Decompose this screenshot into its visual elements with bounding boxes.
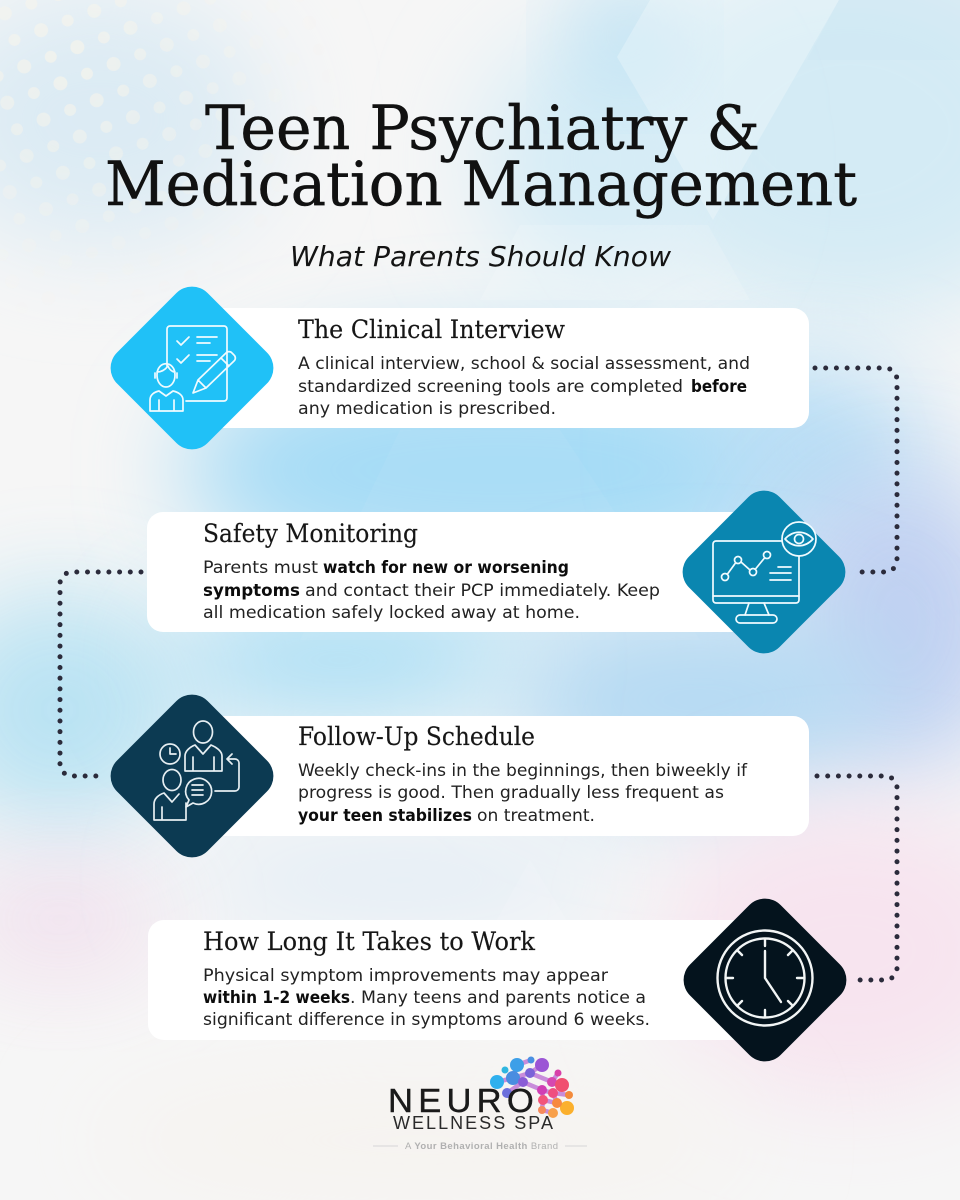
body text bbox=[203, 966, 650, 1030]
title: Medication Management bbox=[105, 149, 857, 220]
logo wordmark: NEURO bbox=[388, 1082, 539, 1119]
body text: before bbox=[691, 377, 747, 397]
logo mark: brain of dots bbox=[490, 1056, 574, 1118]
heading: The Clinical Interview bbox=[298, 315, 566, 344]
body text: significant difference in symptoms around 6 weeks. bbox=[203, 1010, 650, 1030]
heading: Follow-Up Schedule bbox=[298, 722, 535, 751]
body text: your teen stabilizes bbox=[298, 806, 472, 826]
card bbox=[148, 920, 767, 1040]
body text bbox=[298, 354, 750, 419]
body text: Physical symptom improvements may appear bbox=[203, 966, 608, 986]
panel: how long it takes to work bbox=[148, 889, 856, 1071]
connector: step 2 to step 3 bbox=[60, 572, 141, 776]
body text: symptoms bbox=[203, 581, 300, 601]
title: Teen Psychiatry & bbox=[205, 93, 760, 164]
card bbox=[190, 716, 809, 836]
body text: all medication safely locked away at home. bbox=[203, 603, 580, 623]
panel: the clinical interview bbox=[101, 277, 809, 459]
card bbox=[147, 512, 766, 632]
logo bbox=[373, 1056, 587, 1152]
body text: standardized screening tools are completed bbox=[298, 377, 683, 397]
heading: How Long It Takes to Work bbox=[203, 927, 536, 956]
body text: watch for new or worsening bbox=[323, 558, 569, 578]
body text: within 1-2 weeks bbox=[203, 988, 350, 1008]
body text: and contact their PCP immediately. Keep bbox=[305, 581, 660, 601]
panel: safety monitoring bbox=[147, 481, 855, 663]
body text: Weekly check-ins in the beginnings, then biweekly if bbox=[298, 761, 748, 781]
connector: step 3 to step 4 bbox=[817, 776, 897, 980]
card bbox=[190, 308, 809, 428]
subtitle: What Parents Should Know bbox=[290, 240, 671, 273]
panel: follow-up schedule bbox=[101, 685, 809, 867]
body text bbox=[298, 761, 748, 826]
body text: Parents must bbox=[203, 558, 318, 578]
logo tagline: A Your Behavioral Health Brand bbox=[405, 1141, 558, 1152]
icon: clock bbox=[674, 889, 856, 1071]
body text: any medication is prescribed. bbox=[298, 399, 556, 419]
heading: Safety Monitoring bbox=[203, 519, 418, 548]
body text: on treatment. bbox=[477, 806, 595, 826]
body text: progress is good. Then gradually less frequent as bbox=[298, 783, 724, 803]
body text: A clinical interview, school & social assessment, and bbox=[298, 354, 750, 374]
body text bbox=[203, 558, 660, 623]
title bbox=[105, 93, 857, 220]
connector: step 1 to step 2 bbox=[815, 368, 897, 572]
icon: clipboard with person bbox=[101, 277, 283, 459]
icon: people with clock and speech bubble bbox=[101, 685, 283, 867]
icon: monitor with chart and eye bbox=[673, 481, 855, 663]
body text: . Many teens and parents notice a bbox=[350, 988, 646, 1008]
logo: WELLNESS SPA bbox=[393, 1113, 553, 1133]
